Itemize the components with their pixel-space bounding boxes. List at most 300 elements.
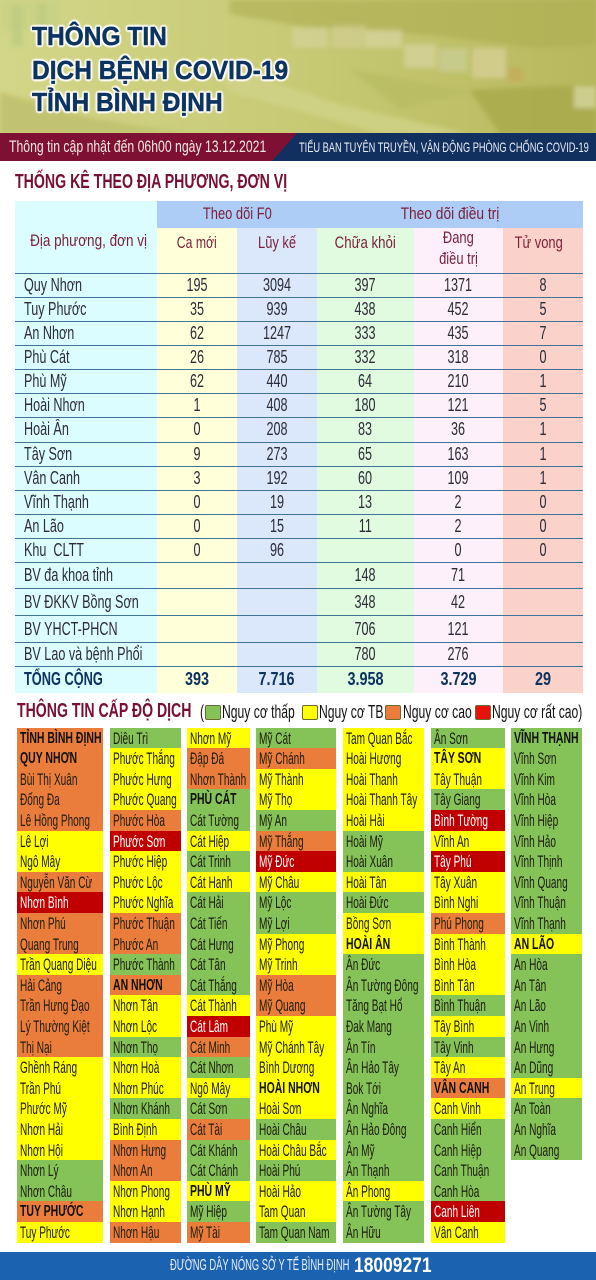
- row: Tây Sơn: 163: [448, 444, 469, 464]
- ward list column 3: An Nhơn, Phù Cát, Phù Mỹ: Cát Hưng: [190, 936, 233, 954]
- ward list column 6: Hoài Ân, Tây Sơn, Vân Canh: Tây Thuận: [434, 771, 482, 789]
- ward list column 6: Hoài Ân, Tây Sơn, Vân Canh: Tây Vinh: [434, 1039, 473, 1057]
- crimson date segment: [0, 133, 297, 161]
- row: Tây Sơn: [15, 442, 583, 466]
- ward list column 1: Quy Nhơn, Tuy Phước: Nhơn Châu: [20, 1183, 71, 1201]
- ward list column 4: Phù Mỹ, Hoài Nhơn: HOÀI NHƠN: [258, 1080, 319, 1097]
- ward list column 6: Hoài Ân, Tây Sơn, Vân Canh: Vĩnh An: [434, 833, 469, 851]
- ward list column 4: Phù Mỹ, Hoài Nhơn: Hoài Châu: [258, 1121, 306, 1139]
- row: BV ĐKKV Bồng Sơn: 42: [451, 592, 466, 612]
- row: Tây Sơn: 273: [266, 444, 288, 464]
- row: Phù Cát: Phù Cát: [24, 347, 70, 367]
- header group: F0 tracking: Theo dõi F0: [203, 204, 271, 223]
- ward list column 4: Phù Mỹ, Hoài Nhơn: Mỹ Quang: [258, 997, 305, 1015]
- row: Khu CLTT: 0: [455, 540, 462, 560]
- ward list column 3: An Nhơn, Phù Cát, Phù Mỹ: Cát Tài: [190, 1121, 222, 1139]
- row: BV YHCT-PHCN: BV YHCT-PHCN: [24, 619, 118, 639]
- table column backgrounds: [15, 201, 583, 693]
- ward list column 3: An Nhơn, Phù Cát, Phù Mỹ: PHÙ CÁT: [190, 791, 236, 808]
- row: An Nhơn: 333: [355, 323, 376, 343]
- ward list column 4: Phù Mỹ, Hoài Nhơn: [256, 728, 336, 1243]
- row: Hoài Ân: 208: [266, 419, 288, 439]
- ward list column 1: Quy Nhơn, Tuy Phước: Lê Lợi: [20, 833, 48, 851]
- ward list column 2: Tuy Phước, An Nhơn: Nhơn An: [112, 1162, 152, 1180]
- ward list column 7: Vĩnh Thạnh, An Lão: Vĩnh Hiệp: [514, 812, 558, 830]
- ward list column 2: Tuy Phước, An Nhơn: AN NHƠN: [112, 977, 162, 994]
- ward list column 1: Quy Nhơn, Tuy Phước: Nhơn Hải: [20, 1121, 62, 1139]
- header: recovered: Chữa khỏi: [335, 233, 396, 252]
- ward list column 4: Phù Mỹ, Hoài Nhơn: Phù Mỹ: [258, 1018, 293, 1036]
- ward list column 7: Vĩnh Thạnh, An Lão: VĨNH THẠNH: [514, 730, 578, 747]
- heading: statistics by locality: THỐNG KÊ THEO ĐỊA PHƯƠNG, ĐƠN VỊ: [15, 171, 287, 193]
- ward list column 7: Vĩnh Thạnh, An Lão: An Dũng: [514, 1059, 553, 1077]
- ward list column 2: Tuy Phước, An Nhơn: Nhơn Khánh: [112, 1100, 169, 1118]
- row: BV YHCT-PHCN: 121: [448, 619, 469, 639]
- ward list column 1: Quy Nhơn, Tuy Phước: QUY NHƠN: [20, 750, 77, 767]
- ward list column 7: Vĩnh Thạnh, An Lão: An Quang: [514, 1142, 559, 1160]
- legend label: low risk: Nguy cơ thấp: [222, 702, 295, 722]
- ward list column 2: Tuy Phước, An Nhơn: Phước Lộc: [112, 874, 162, 892]
- row: Vân Canh: [15, 466, 583, 490]
- ward list column 7: Vĩnh Thạnh, An Lão: An Tân: [514, 977, 546, 995]
- ward list column 7: Vĩnh Thạnh, An Lão: An Hòa: [514, 956, 547, 974]
- ward list column 3: An Nhơn, Phù Cát, Phù Mỹ: Cát Trinh: [190, 853, 230, 871]
- row: total: 393: [185, 669, 209, 689]
- header: under treatment: [439, 228, 478, 268]
- legend: risk levels: (: [200, 702, 204, 722]
- legend swatch: low risk: [205, 705, 221, 720]
- ward list column 3: An Nhơn, Phù Cát, Phù Mỹ: Ngô Mây: [190, 1080, 230, 1098]
- ward list column 7: Vĩnh Thạnh, An Lão: Vĩnh Quang: [514, 874, 568, 892]
- row: BV ĐKKV Bồng Sơn: BV ĐKKV Bồng Sơn: [24, 592, 139, 612]
- row: An Nhơn: 435: [448, 323, 469, 343]
- ward list column 4: Phù Mỹ, Hoài Nhơn: Mỹ Hòa: [258, 977, 293, 995]
- ward list column 6: Hoài Ân, Tây Sơn, Vân Canh: Tây Xuân: [434, 874, 477, 892]
- ward list column 5: Hoài Nhơn, Hoài Ân: Hoài Đức: [346, 894, 388, 912]
- row: Vĩnh Thạnh: 2: [455, 492, 462, 512]
- ward list column 3: An Nhơn, Phù Cát, Phù Mỹ: Nhơn Thành: [190, 771, 246, 789]
- row: BV ĐKKV Bồng Sơn: [15, 588, 583, 615]
- row: Vân Canh: 192: [266, 468, 288, 488]
- ward list column 7: Vĩnh Thạnh, An Lão: An Vinh: [514, 1018, 549, 1036]
- ward list column 6: Hoài Ân, Tây Sơn, Vân Canh: Tây Giang: [434, 791, 480, 809]
- legend: risk levels: [200, 702, 582, 722]
- table header: [30, 204, 563, 268]
- row: Vân Canh: 109: [448, 468, 469, 488]
- ward list column 6: Hoài Ân, Tây Sơn, Vân Canh: Canh Hòa: [434, 1183, 479, 1201]
- ward list column 3: An Nhơn, Phù Cát, Phù Mỹ: Cát Tiến: [190, 915, 227, 933]
- legend swatch: high risk: [385, 705, 401, 720]
- ward list column 4: Phù Mỹ, Hoài Nhơn: Hoài Phú: [258, 1162, 300, 1180]
- ward list column 6: Hoài Ân, Tây Sơn, Vân Canh: Canh Hiệp: [434, 1142, 481, 1160]
- ward list column 3: An Nhơn, Phù Cát, Phù Mỹ: Cát Tân: [190, 956, 225, 974]
- panel: statistics table: [15, 201, 583, 693]
- row: Quy Nhơn: 397: [355, 275, 376, 295]
- ward list column 3: An Nhơn, Phù Cát, Phù Mỹ: Cát Hải: [190, 894, 223, 912]
- ward list column 1: Quy Nhơn, Tuy Phước: Đống Đa: [20, 791, 59, 809]
- ward list column 7: Vĩnh Thạnh, An Lão: An Toàn: [514, 1100, 551, 1118]
- row: BV Lao và bệnh Phổi: 276: [448, 644, 469, 664]
- ward list column 6: Hoài Ân, Tây Sơn, Vân Canh: Canh Thuận: [434, 1162, 489, 1180]
- ward list column 3: An Nhơn, Phù Cát, Phù Mỹ: Đập Đá: [190, 750, 224, 768]
- row: An Nhơn: 7: [539, 323, 546, 343]
- row: Vĩnh Thạnh: 0: [539, 492, 546, 512]
- row: Hoài Nhơn: 180: [355, 395, 376, 415]
- ward list column 1: Quy Nhơn, Tuy Phước: Nhơn Phú: [20, 915, 65, 933]
- ward list column 1: Quy Nhơn, Tuy Phước: TUY PHƯỚC: [20, 1203, 83, 1220]
- ward list column 3: An Nhơn, Phù Cát, Phù Mỹ: Cát Thành: [190, 997, 236, 1015]
- row: Tuy Phước: 939: [266, 299, 288, 319]
- ward list column 6: Hoài Ân, Tây Sơn, Vân Canh: Phú Phong: [434, 915, 484, 933]
- row: Hoài Nhơn: [15, 393, 583, 417]
- ward list column 2: Tuy Phước, An Nhơn: Nhơn Thọ: [112, 1039, 158, 1057]
- ward list column 6: Hoài Ân, Tây Sơn, Vân Canh: [431, 728, 505, 1243]
- ward list column 5: Hoài Nhơn, Hoài Ân: Tam Quan Bắc: [346, 730, 412, 748]
- row: Khu CLTT: [15, 538, 583, 562]
- ward list column 2: Tuy Phước, An Nhơn: Nhơn Phong: [112, 1183, 169, 1201]
- ward list column 5: Hoài Nhơn, Hoài Ân: Tăng Bạt Hổ: [346, 997, 402, 1015]
- header: cumulative: Lũy kế: [258, 233, 296, 252]
- ward list column 7: Vĩnh Thạnh, An Lão: Vĩnh Hòa: [514, 791, 556, 809]
- row: Phù Cát: [15, 345, 583, 369]
- row: An Nhơn: [15, 321, 583, 345]
- ward list column 4: Phù Mỹ, Hoài Nhơn: Mỹ Chánh: [258, 750, 304, 768]
- row: Tây Sơn: 65: [358, 444, 373, 464]
- ward list column 1: Quy Nhơn, Tuy Phước: Lê Hồng Phong: [20, 812, 89, 830]
- organising committee text: TIỂU BAN TUYÊN TRUYỀN, VẬN ĐỘNG PHÒNG CHỐNG COVID-19: [299, 139, 589, 155]
- ward list column 6: Hoài Ân, Tây Sơn, Vân Canh: Tây Phú: [434, 853, 471, 871]
- ward list column 3: An Nhơn, Phù Cát, Phù Mỹ: Cát Minh: [190, 1039, 230, 1057]
- ward list column 1: Quy Nhơn, Tuy Phước: Tuy Phước: [20, 1224, 69, 1242]
- ward list column 5: Hoài Nhơn, Hoài Ân: Ân Tường Đông: [346, 977, 418, 995]
- row: Phù Mỹ: 62: [190, 371, 204, 391]
- ward list column 1: Quy Nhơn, Tuy Phước: Nhơn Bình: [20, 894, 68, 912]
- row: Hoài Nhơn: Hoài Nhơn: [24, 395, 85, 415]
- row: An Lão: 11: [359, 516, 372, 536]
- ward list column 3: An Nhơn, Phù Cát, Phù Mỹ: Mỹ Hiệp: [190, 1203, 226, 1221]
- ward list column 3: An Nhơn, Phù Cát, Phù Mỹ: Cát Chánh: [190, 1162, 238, 1180]
- row: BV đa khoa tỉnh: 148: [355, 565, 376, 585]
- row: Hoài Nhơn: 408: [266, 395, 288, 415]
- ward list column 2: Tuy Phước, An Nhơn: Phước Quang: [112, 791, 176, 809]
- ward list column 6: Hoài Ân, Tây Sơn, Vân Canh: Bình Thuận: [434, 997, 486, 1015]
- row: BV ĐKKV Bồng Sơn: 348: [355, 592, 376, 612]
- ward list column 5: Hoài Nhơn, Hoài Ân: Ân Đức: [346, 956, 380, 974]
- row: Quy Nhơn: [15, 273, 583, 297]
- ward list column 2: Tuy Phước, An Nhơn: Phước Nghĩa: [112, 894, 173, 912]
- ward list column 2: Tuy Phước, An Nhơn: Nhơn Lộc: [112, 1018, 157, 1036]
- ward list column 5: Hoài Nhơn, Hoài Ân: Ân Nghĩa: [346, 1100, 387, 1118]
- legend swatch: very high risk: [475, 705, 491, 720]
- ward list column 2: Tuy Phước, An Nhơn: Phước Hòa: [112, 812, 164, 830]
- row: total: 29: [535, 669, 551, 689]
- ward list column 1: Quy Nhơn, Tuy Phước: Nguyễn Văn Cừ: [20, 874, 92, 892]
- row: Hoài Ân: Hoài Ân: [24, 419, 69, 439]
- ward list column 2: Tuy Phước, An Nhơn: Bình Định: [112, 1121, 157, 1139]
- row: Phù Mỹ: 440: [266, 371, 288, 391]
- ward list column 6: Hoài Ân, Tây Sơn, Vân Canh: TÂY SƠN: [434, 750, 481, 767]
- ward list column 5: Hoài Nhơn, Hoài Ân: Hoài Thanh Tây: [346, 791, 417, 809]
- header banner: aerial city photo in olive tint: [0, 0, 596, 133]
- ward list column 4: Phù Mỹ, Hoài Nhơn: Hoài Châu Bắc: [258, 1142, 326, 1160]
- row: Tuy Phước: 438: [355, 299, 376, 319]
- row: An Lão: [15, 514, 583, 538]
- ward list column 4: Phù Mỹ, Hoài Nhơn: Hoài Hảo: [258, 1183, 300, 1201]
- ward list column 4: Phù Mỹ, Hoài Nhơn: Tam Quan: [258, 1203, 305, 1221]
- ward list column 1: Quy Nhơn, Tuy Phước: Nhơn Lý: [20, 1162, 58, 1180]
- row: Phù Cát: 785: [266, 347, 288, 367]
- ward list column 1: Quy Nhơn, Tuy Phước: Nhơn Hội: [20, 1142, 62, 1160]
- legend label: high risk: Nguy cơ cao: [403, 702, 472, 722]
- ward list column 3: An Nhơn, Phù Cát, Phù Mỹ: Mỹ Tài: [190, 1224, 220, 1242]
- ward list column 4: Phù Mỹ, Hoài Nhơn: Mỹ Cát: [258, 730, 290, 748]
- ward list column 7: Vĩnh Thạnh, An Lão: An Hưng: [514, 1039, 554, 1057]
- ward list column 1: Quy Nhơn, Tuy Phước: Lý Thường Kiệt: [20, 1018, 89, 1036]
- header: new cases: Ca mới: [177, 233, 217, 252]
- ward list column 6: Hoài Ân, Tây Sơn, Vân Canh: Canh Vinh: [434, 1100, 481, 1118]
- header: under treatment: điều trị: [439, 249, 478, 268]
- row: Tuy Phước: 452: [448, 299, 469, 319]
- row: total: TỔNG CỘNG: [24, 669, 103, 689]
- row: Hoài Ân: 0: [193, 419, 200, 439]
- title line 3: TỈNH BÌNH ĐỊNH: [32, 87, 223, 117]
- ward list column 3: An Nhơn, Phù Cát, Phù Mỹ: PHÙ MỸ: [190, 1183, 230, 1200]
- row: total: 3.729: [440, 669, 477, 689]
- header group: treatment tracking: Theo dõi điều trị: [401, 204, 499, 223]
- ward list column 5: Hoài Nhơn, Hoài Ân: Hoài Hương: [346, 750, 401, 768]
- ward list column 1: Quy Nhơn, Tuy Phước: Quang Trung: [20, 936, 78, 954]
- ward list column 2: Tuy Phước, An Nhơn: [110, 728, 181, 1243]
- row: total: [15, 666, 583, 693]
- ward list column 3: An Nhơn, Phù Cát, Phù Mỹ: Cát Lâm: [190, 1018, 228, 1036]
- ward list column 1: Quy Nhơn, Tuy Phước: Hải Cảng: [20, 977, 61, 995]
- row: Tuy Phước: 5: [539, 299, 546, 319]
- ward list column 1: Quy Nhơn, Tuy Phước: Ngô Mây: [20, 853, 60, 871]
- row: Hoài Nhơn: 5: [539, 395, 546, 415]
- ward list column 3: An Nhơn, Phù Cát, Phù Mỹ: Cát Sơn: [190, 1100, 227, 1118]
- row: BV đa khoa tỉnh: 71: [451, 565, 466, 585]
- ward list column 7: Vĩnh Thạnh, An Lão: An Nghĩa: [514, 1121, 556, 1139]
- ward list column 1: Quy Nhơn, Tuy Phước: Trần Quang Diệu: [20, 956, 96, 974]
- ward list column 5: Hoài Nhơn, Hoài Ân: Hoài Xuân: [346, 853, 393, 871]
- ward list column 1: Quy Nhơn, Tuy Phước: Ghềnh Ráng: [20, 1059, 77, 1077]
- ward list column 6: Hoài Ân, Tây Sơn, Vân Canh: Canh Hiển: [434, 1121, 481, 1139]
- ward list column 2: Tuy Phước, An Nhơn: Nhơn Hạnh: [112, 1203, 164, 1221]
- hotline label: ĐƯỜNG DÂY NÓNG SỞ Y TẾ BÌNH ĐỊNH: [170, 1256, 349, 1274]
- ward list column 6: Hoài Ân, Tây Sơn, Vân Canh: VÂN CANH: [434, 1080, 489, 1097]
- legend label: medium risk: Nguy cơ TB: [319, 702, 383, 722]
- row: Phù Cát: 332: [355, 347, 376, 367]
- ward list column 5: Hoài Nhơn, Hoài Ân: Ân Hảo Tây: [346, 1059, 398, 1077]
- ward list column 2: Tuy Phước, An Nhơn: Phước Sơn: [112, 833, 165, 851]
- ward list column 6: Hoài Ân, Tây Sơn, Vân Canh: Bình Tân: [434, 977, 474, 995]
- ward list column 6: Hoài Ân, Tây Sơn, Vân Canh: Tây An: [434, 1059, 465, 1077]
- row: Vân Canh: 60: [358, 468, 373, 488]
- ward list column 7: Vĩnh Thạnh, An Lão: An Trung: [514, 1080, 555, 1098]
- ward list column 7: Vĩnh Thạnh, An Lão: Vĩnh Thịnh: [514, 853, 562, 871]
- ward list column 4: Phù Mỹ, Hoài Nhơn: Mỹ Châu: [258, 874, 299, 892]
- ward list column 4: Phù Mỹ, Hoài Nhơn: Mỹ Trinh: [258, 956, 297, 974]
- title: [29, 18, 290, 119]
- row: Vân Canh: Vân Canh: [24, 468, 80, 488]
- row: Tuy Phước: 35: [190, 299, 204, 319]
- row: An Nhơn: 1247: [263, 323, 291, 343]
- ward list column 4: Phù Mỹ, Hoài Nhơn: Mỹ Lợi: [258, 915, 289, 933]
- ward list column 2: Tuy Phước, An Nhơn: Phước Thành: [112, 956, 174, 974]
- ward list column 2: Tuy Phước, An Nhơn: Nhơn Hưng: [112, 1142, 166, 1160]
- ward list column 2: Tuy Phước, An Nhơn: Nhơn Hoà: [112, 1059, 159, 1077]
- ward list column 4: Phù Mỹ, Hoài Nhơn: Mỹ Chánh Tây: [258, 1039, 324, 1057]
- ward list column 7: Vĩnh Thạnh, An Lão: Vĩnh Sơn: [514, 750, 556, 768]
- ward list column 5: Hoài Nhơn, Hoài Ân: Bồng Sơn: [346, 915, 391, 933]
- row: BV đa khoa tỉnh: [15, 562, 583, 588]
- ward list column 3: An Nhơn, Phù Cát, Phù Mỹ: Cát Nhơn: [190, 1059, 233, 1077]
- ward list column 5: Hoài Nhơn, Hoài Ân: [343, 728, 424, 1243]
- row: Khu CLTT: Khu CLTT: [24, 540, 84, 560]
- title line 1: THÔNG TIN: [32, 21, 167, 51]
- row: Vĩnh Thạnh: [15, 490, 583, 514]
- row: Hoài Ân: 1: [539, 419, 546, 439]
- ward list column 7: Vĩnh Thạnh, An Lão: Vĩnh Thuận: [514, 894, 566, 912]
- row: Hoài Ân: 36: [451, 419, 466, 439]
- row: Phù Cát: 0: [539, 347, 546, 367]
- row: Hoài Ân: 83: [358, 419, 373, 439]
- ward list column 2: Tuy Phước, An Nhơn: Phước Thuận: [112, 915, 174, 933]
- header: under treatment: Đang: [443, 228, 474, 247]
- row: An Lão: 0: [539, 516, 546, 536]
- ward list column 3: An Nhơn, Phù Cát, Phù Mỹ: Cát Tường: [190, 812, 238, 830]
- row: Phù Cát: 318: [448, 347, 469, 367]
- ward list column 4: Phù Mỹ, Hoài Nhơn: Bình Dương: [258, 1059, 314, 1077]
- row: BV Lao và bệnh Phổi: [15, 642, 583, 666]
- ward list column 6: Hoài Ân, Tây Sơn, Vân Canh: Vân Canh: [434, 1224, 479, 1242]
- hotline number: 18009271: [354, 1254, 432, 1276]
- ward list column 3: An Nhơn, Phù Cát, Phù Mỹ: Cát Hanh: [190, 874, 232, 892]
- row: Vĩnh Thạnh: Vĩnh Thạnh: [24, 492, 89, 512]
- ward list column 2: Tuy Phước, An Nhơn: Phước An: [112, 936, 158, 954]
- row: An Nhơn: 62: [190, 323, 204, 343]
- header: deaths: Tử vong: [515, 233, 563, 252]
- ward list column 3: An Nhơn, Phù Cát, Phù Mỹ: Cát Khánh: [190, 1142, 237, 1160]
- ward list column 1: Quy Nhơn, Tuy Phước: Trần Hưng Đạo: [20, 997, 89, 1015]
- ward list column 1: Quy Nhơn, Tuy Phước: TỈNH BÌNH ĐỊNH: [20, 730, 101, 747]
- ward list column 4: Phù Mỹ, Hoài Nhơn: Hoài Sơn: [258, 1100, 301, 1118]
- legend label: very high risk: Nguy cơ rất cao): [492, 702, 582, 722]
- ward list column 1: Quy Nhơn, Tuy Phước: Thị Nại: [20, 1039, 51, 1057]
- row: Hoài Nhơn: 1: [193, 395, 200, 415]
- ward list column 6: Hoài Ân, Tây Sơn, Vân Canh: Canh Liên: [434, 1203, 480, 1221]
- ward list column 1: Quy Nhơn, Tuy Phước: Trần Phú: [20, 1080, 61, 1098]
- ward list column 7: Vĩnh Thạnh, An Lão: Vĩnh Thạnh: [514, 915, 566, 933]
- ward list column 7: Vĩnh Thạnh, An Lão: Vĩnh Hảo: [514, 833, 556, 851]
- ward list column 5: Hoài Nhơn, Hoài Ân: Hoài Tân: [346, 874, 386, 892]
- row: Phù Mỹ: 1: [539, 371, 546, 391]
- row: BV Lao và bệnh Phổi: 780: [355, 644, 376, 664]
- ward list column 4: Phù Mỹ, Hoài Nhơn: Mỹ Đức: [258, 853, 294, 871]
- ward list column 2: Tuy Phước, An Nhơn: Phước Hưng: [112, 771, 171, 789]
- row: Khu CLTT: 96: [270, 540, 284, 560]
- row: Vĩnh Thạnh: 13: [358, 492, 373, 512]
- ward list column 5: Hoài Nhơn, Hoài Ân: HOÀI ÂN: [346, 936, 390, 953]
- ward list column 2: Tuy Phước, An Nhơn: Nhơn Phúc: [112, 1080, 163, 1098]
- ward list column 4: Phù Mỹ, Hoài Nhơn: Mỹ Lộc: [258, 894, 291, 912]
- ward list column 7: Vĩnh Thạnh, An Lão: An Lão: [514, 997, 546, 1015]
- row: Phù Cát: 26: [190, 347, 204, 367]
- row: Vĩnh Thạnh: 0: [193, 492, 200, 512]
- ward list column 3: An Nhơn, Phù Cát, Phù Mỹ: Cát Thắng: [190, 977, 236, 995]
- ward list column 5: Hoài Nhơn, Hoài Ân: Đak Mang: [346, 1018, 391, 1036]
- ward list column 5: Hoài Nhơn, Hoài Ân: Hoài Mỹ: [346, 833, 382, 851]
- ward list column 5: Hoài Nhơn, Hoài Ân: Ân Tường Tây: [346, 1203, 411, 1221]
- legend swatch: medium risk: [302, 705, 318, 720]
- ward list column 4: Phù Mỹ, Hoài Nhơn: Mỹ Thành: [258, 771, 303, 789]
- row: total: 3.958: [347, 669, 384, 689]
- ward list column 4: Phù Mỹ, Hoài Nhơn: Mỹ Thọ: [258, 791, 292, 809]
- ward list column 3: An Nhơn, Phù Cát, Phù Mỹ: Cát Hiệp: [190, 833, 229, 851]
- ward list column 5: Hoài Nhơn, Hoài Ân: Ân Phong: [346, 1183, 390, 1201]
- ward list column 6: Hoài Ân, Tây Sơn, Vân Canh: Bình Tường: [434, 812, 488, 830]
- row: Phù Mỹ: 64: [358, 371, 373, 391]
- row: Quy Nhơn: 195: [186, 275, 208, 295]
- row: Quy Nhơn: 1371: [444, 275, 473, 295]
- footer hotline bar: [0, 1252, 596, 1280]
- ward list column 5: Hoài Nhơn, Hoài Ân: Ân Hữu: [346, 1224, 380, 1242]
- row: Vĩnh Thạnh: 19: [270, 492, 284, 512]
- row: BV Lao và bệnh Phổi: BV Lao và bệnh Phổi: [24, 644, 142, 664]
- update date text: Thông tin cập nhật đến 06h00 ngày 13.12.2021: [9, 137, 266, 156]
- ward list column 5: Hoài Nhơn, Hoài Ân: Bok Tới: [346, 1080, 380, 1098]
- ward list column 6: Hoài Ân, Tây Sơn, Vân Canh: Bình Hòa: [434, 956, 476, 974]
- ward list column 2: Tuy Phước, An Nhơn: Nhơn Tân: [112, 997, 158, 1015]
- row: Phù Mỹ: Phù Mỹ: [24, 371, 67, 391]
- ward list column 1: Quy Nhơn, Tuy Phước: Phước Mỹ: [20, 1100, 66, 1118]
- ward list column 3: An Nhơn, Phù Cát, Phù Mỹ: [187, 728, 250, 1243]
- row: Khu CLTT: 0: [539, 540, 546, 560]
- ward list column 5: Hoài Nhơn, Hoài Ân: Ân Tín: [346, 1039, 375, 1057]
- row: Tuy Phước: Tuy Phước: [24, 299, 86, 319]
- ward list column 6: Hoài Ân, Tây Sơn, Vân Canh: Bình Nghi: [434, 894, 478, 912]
- row: Quy Nhơn: 8: [539, 275, 546, 295]
- ward list column 4: Phù Mỹ, Hoài Nhơn: Mỹ Phong: [258, 936, 304, 954]
- row: An Lão: 0: [193, 516, 200, 536]
- row: Vân Canh: 3: [193, 468, 200, 488]
- header: locality: Địa phương, đơn vị: [30, 231, 147, 250]
- ward list column 2: Tuy Phước, An Nhơn: Phước Thắng: [112, 750, 174, 768]
- ward list column 7: Vĩnh Thạnh, An Lão: [511, 728, 582, 1160]
- row: Phù Mỹ: 210: [448, 371, 469, 391]
- row: Hoài Nhơn: 121: [448, 395, 469, 415]
- row: Quy Nhơn: Quy Nhơn: [24, 275, 82, 295]
- ward list column 1: Quy Nhơn, Tuy Phước: Bùi Thị Xuân: [20, 771, 77, 789]
- update banner band: [0, 133, 596, 161]
- ward list column 5: Hoài Nhơn, Hoài Ân: Ân Mỹ: [346, 1142, 374, 1160]
- ward list column 6: Hoài Ân, Tây Sơn, Vân Canh: Tây Bình: [434, 1018, 474, 1036]
- row: Vân Canh: 1: [539, 468, 546, 488]
- row: An Lão: An Lão: [24, 516, 64, 536]
- ward list column 5: Hoài Nhơn, Hoài Ân: Ân Hảo Đông: [346, 1121, 406, 1139]
- row: BV đa khoa tỉnh: BV đa khoa tỉnh: [24, 565, 113, 585]
- row: Phù Mỹ: [15, 369, 583, 393]
- ward list column 4: Phù Mỹ, Hoài Nhơn: Mỹ An: [258, 812, 286, 830]
- heading: epidemic level information: THÔNG TIN CẤP ĐỘ DỊCH: [17, 700, 191, 722]
- ward list column 5: Hoài Nhơn, Hoài Ân: Hoài Hải: [346, 812, 384, 830]
- ward list column 7: Vĩnh Thạnh, An Lão: Vĩnh Kim: [514, 771, 555, 789]
- row: BV YHCT-PHCN: [15, 615, 583, 642]
- row: Tây Sơn: 9: [193, 444, 200, 464]
- row: Quy Nhơn: 3094: [263, 275, 291, 295]
- ward list column 2: Tuy Phước, An Nhơn: Phước Hiệp: [112, 853, 167, 871]
- ward list column 4: Phù Mỹ, Hoài Nhơn: Tam Quan Nam: [258, 1224, 329, 1242]
